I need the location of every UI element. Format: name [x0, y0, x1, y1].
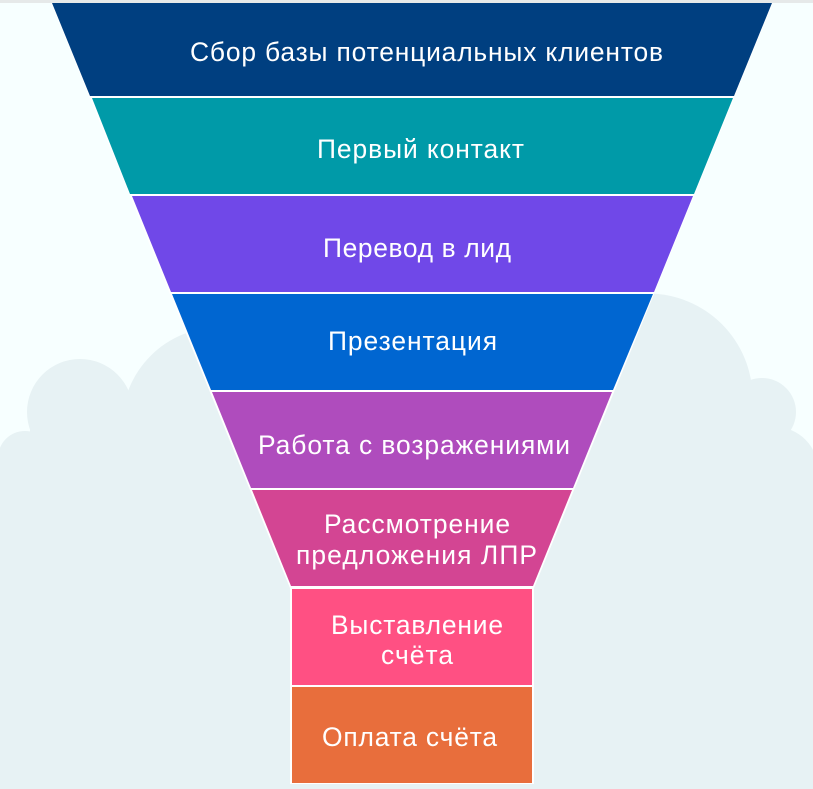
- stage 6: decision maker review: [252, 490, 572, 586]
- stage 7: invoicing: счёта: [381, 640, 453, 670]
- stage 5: handling objections: [212, 392, 612, 488]
- background cloud: [0, 294, 813, 789]
- stage 3: conversion to lead: Перевод в лид: [323, 233, 511, 263]
- stage 1: lead base collection: Сбор базы потенциальных клиентов: [190, 37, 663, 67]
- stage 7: invoicing: Выставление: [331, 610, 503, 640]
- stage 2: first contact: [92, 98, 733, 194]
- stage 6: decision maker review: Рассмотрение: [324, 509, 510, 539]
- stage 1: lead base collection: [52, 3, 772, 96]
- stage 2: first contact: Первый контакт: [317, 134, 524, 164]
- stage 3: conversion to lead: [132, 196, 693, 292]
- stage 7: invoicing: [292, 589, 532, 685]
- stage 4: presentation: Презентация: [328, 326, 497, 356]
- stage 8: invoice payment: Оплата счёта: [322, 722, 497, 752]
- stage 5: handling objections: Работа с возражениями: [258, 430, 570, 460]
- stage 8: invoice payment: [292, 687, 532, 783]
- stage 4: presentation: [172, 294, 653, 390]
- stage 6: decision maker review: предложения ЛПР: [296, 540, 537, 570]
